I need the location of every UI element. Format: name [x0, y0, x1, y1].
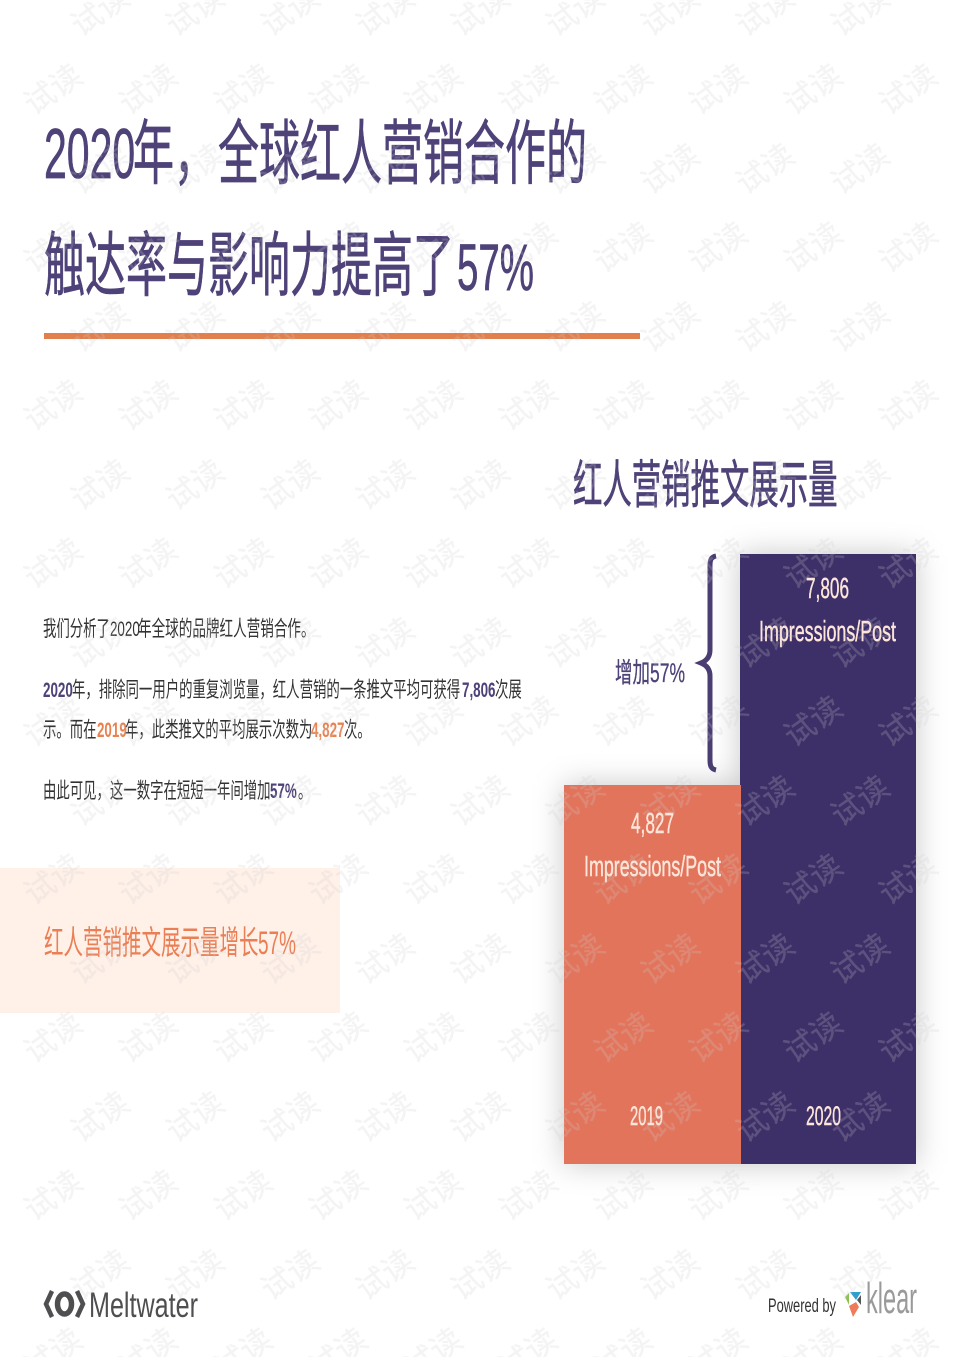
- increase label: 57%: [650, 657, 685, 688]
- paragraph: conclusion: 。: [298, 779, 311, 803]
- title: 57%: [457, 231, 534, 305]
- callout text: 红人营销推文展示量增长: [44, 924, 258, 961]
- paragraph: 2019 result: 4,827: [311, 718, 345, 742]
- powered by: Powered by: [768, 1295, 836, 1317]
- paragraph: 2019 result: 示。而在: [43, 718, 97, 742]
- paragraph: 2020 result: 7,806: [462, 678, 496, 702]
- logo: Powered by klear: [768, 1273, 917, 1323]
- bar chart: [564, 554, 916, 1164]
- paragraph: scope: 2020: [110, 617, 140, 641]
- bar label: 7,806: 7,806: [806, 573, 849, 605]
- paragraph: 2020 result: 年，排除同一用户的重复浏览量，红人营销的一条推文平均可获得: [72, 678, 460, 702]
- paragraph: 2020 result: 2020: [43, 678, 73, 702]
- bar label: 2019: 2019: [630, 1101, 663, 1131]
- bar label: 4,827: 4,827: [631, 808, 674, 840]
- intro text block: [43, 617, 522, 803]
- klear icon: [845, 1292, 861, 1317]
- klear wordmark: klear: [866, 1273, 917, 1323]
- Meltwater wordmark: Meltwater: [89, 1287, 198, 1325]
- bar shadows: [564, 554, 916, 1164]
- callout band: [0, 868, 340, 1013]
- brace: [701, 556, 716, 770]
- title: [44, 116, 587, 306]
- title: 2020: [44, 116, 135, 194]
- bar: 2020: [740, 554, 916, 1164]
- paragraph: 2020 result: 次展: [495, 678, 522, 702]
- Meltwater icon: [46, 1291, 83, 1317]
- callout text: 57%: [258, 925, 296, 961]
- title: 年，: [133, 116, 215, 194]
- increase label: 增加: [615, 657, 650, 688]
- paragraph: conclusion: 57%: [270, 779, 297, 803]
- logo: Meltwater: [46, 1287, 198, 1325]
- title underline: [44, 333, 640, 339]
- title: 全球红人营销合作的: [218, 116, 587, 194]
- bar: 2019: [564, 785, 741, 1164]
- paragraph: scope: 年全球的品牌红人营销合作。: [138, 617, 315, 641]
- title: 触达率与影响力提高了: [44, 228, 454, 306]
- bar label: impressions 2020: Impressions/Post: [759, 616, 896, 648]
- chart title: 红人营销推文展示量: [573, 456, 838, 514]
- paragraph: 2019 result: 2019: [97, 718, 127, 742]
- bar label: impressions 2019: Impressions/Post: [584, 851, 721, 883]
- paragraph: 2019 result: 次。: [344, 718, 371, 742]
- paragraph: scope: 我们分析了: [43, 617, 110, 641]
- paragraph: 2019 result: 年，此类推文的平均展示次数为: [125, 718, 312, 742]
- bar label: 2020: 2020: [806, 1101, 841, 1131]
- paragraph: conclusion: 由此可见，这一数字在短短一年间增加: [43, 779, 271, 803]
